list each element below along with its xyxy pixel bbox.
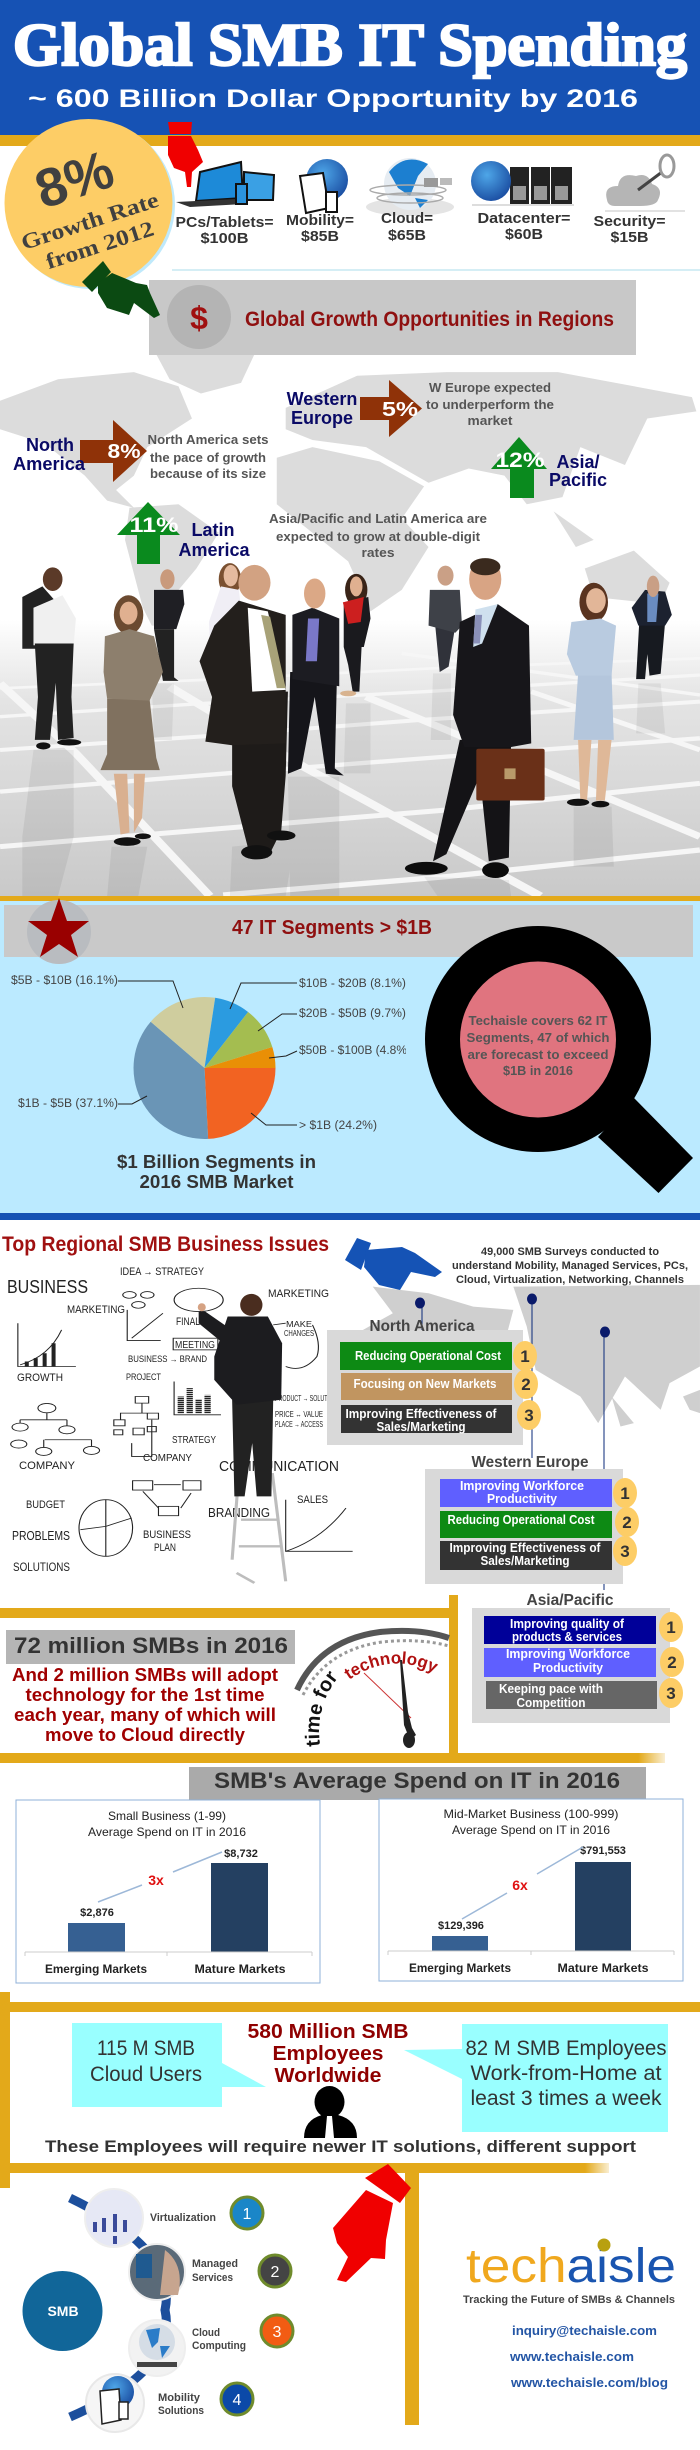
item: mobility solutions: Mobility [158,2392,201,2404]
icon: cloud globe [366,158,454,216]
item: managed services: Services [192,2272,233,2284]
SMB circle: SMB [47,2303,79,2319]
pie chart caption [117,1152,316,1192]
whiteboard sketches: MEETING [175,1340,215,1351]
panel: North America issues [327,1318,541,1445]
item: mobility solutions: Solutions [158,2405,204,2417]
item: mobility solutions [86,2374,253,2432]
arrow: Western Europe 5%: 5% [382,399,418,421]
bar chart: small business: Emerging Markets [45,1962,147,1976]
pie chart caption: $1 Billion Segments in [117,1152,316,1172]
whiteboard sketches: SOLUTIONS [13,1560,70,1574]
whiteboard sketches [7,1266,353,1574]
arrow: North America 8%: 8% [108,441,141,463]
label: Datacenter [478,210,571,243]
label: Western Europe: Europe [291,408,353,428]
label: Mobility: $85B [301,228,339,245]
bar chart: mid-market business: $129,396 [438,1920,484,1932]
whiteboard sketches: MARKETING [67,1304,125,1316]
panel: Western Europe issues: 1 [620,1484,630,1503]
contact details: www.techaisle.com [509,2350,634,2364]
label: Security: Security= [594,213,666,230]
panel: Asia/Pacific issues: Improving quality of [510,1617,625,1631]
map pins [415,1294,610,1590]
panel: Asia/Pacific issues: Asia/Pacific [526,1592,614,1609]
magnifying glass callout: Segments, 47 of which [466,1031,610,1045]
panel: Western Europe issues: 3 [620,1542,630,1561]
badge: 8% growth rate: from 2012 [43,216,157,274]
pie chart: $1B - $5B (37.1%) [18,1098,118,1110]
person: man with jacket over shoulder [22,567,81,749]
icon: large red pointing hand [333,2164,411,2282]
label: Datacenter: $60B [505,226,543,243]
arrow: Latin America 11%: 11% [130,514,179,537]
pie chart [11,975,411,1139]
label: Asia/Pacific: Asia/ [556,452,600,472]
label: Datacenter: Datacenter= [478,210,571,227]
magnifying glass callout [425,926,693,1193]
magnifying glass callout: Techaisle covers 62 IT [468,1014,608,1028]
whiteboard sketches: COMPANY [19,1460,76,1472]
text: Western Europe note: to underperform the [426,397,554,412]
icon: red pointing hand [168,122,203,187]
icon: blue pointing hand [345,1238,442,1290]
contact details: www.techaisle.com/blog [510,2376,668,2390]
panel: Western Europe issues: Improving Effectiveness of [450,1541,601,1555]
whiteboard sketches: BRANDING [208,1505,270,1520]
world map and floor background [0,354,700,896]
panel: Asia/Pacific issues: 3 [666,1684,676,1703]
whiteboard sketches: MAKE [286,1320,312,1329]
text: North America note [148,432,268,481]
item: cloud computing [129,2315,293,2376]
whiteboard sketches: PLAN [154,1542,176,1554]
person: woman in light blue [567,583,616,807]
label: Cloud: Cloud= [381,210,433,227]
text: Western Europe note: W Europe expected [429,380,551,395]
bar chart: small business: Mature Markets [194,1962,286,1976]
panel: Western Europe issues: Sales/Marketing [480,1554,570,1568]
bar chart: mid-market business: Mid-Market Business (100-999) [444,1807,618,1821]
label: Latin America: America [178,540,251,560]
icon: green pointing hand [82,261,160,318]
bar chart: small business: $2,876 [80,1907,114,1919]
subtitle: ~ 600 Billion Dollar Opportunity by 2016 [28,85,638,113]
text: 2 million SMBs: technology for the 1st time [26,1685,264,1705]
label: Western Europe: Western [287,389,357,409]
panel: North America issues: Sales/Marketing [376,1420,466,1434]
panel: North America issues: 2 [521,1375,531,1394]
panel: Asia/Pacific issues: Productivity [533,1661,603,1675]
icon: PCs and tablets [176,162,274,207]
floor reflections [22,673,665,896]
pie chart: > $1B (24.2%) [299,1120,377,1132]
SMB circle [22,2271,102,2351]
label: Western Europe [287,389,357,428]
panel: Asia/Pacific issues: 2 [667,1653,677,1672]
pie chart: $10B - $20B (8.1%) [299,978,406,990]
whiteboard sketches: BUDGET [26,1499,65,1511]
bar chart: small business: $8,732 [224,1848,258,1860]
panel: Asia/Pacific issues: Keeping pace with [499,1682,603,1696]
magnifying glass callout: $1B in 2016 [503,1064,573,1078]
gold dividers, SMB section [0,1595,665,1763]
whiteboard sketches: PROBLEMS [12,1528,70,1543]
heading: 580 million employees: 580 Million SMB [248,2021,408,2043]
text: 2 million SMBs: And 2 million SMBs will adopt [12,1665,278,1685]
pie chart: $5B - $10B (16.1%) [11,975,118,987]
text: newer IT solutions: These Employees will require newer IT solutions, different support [45,2138,637,2156]
section banner: average spend [189,1767,646,1800]
whiteboard sketches: BUSINESS → BRAND [128,1354,207,1364]
world map, regional issues [339,1285,700,1426]
text: North America note: North America sets [148,432,268,447]
whiteboard sketches: PRICE ↔ VALUE [275,1410,323,1419]
whiteboard sketches: FINAL [176,1316,200,1328]
callout: cloud users: 115 M SMB [97,2037,195,2060]
arrow: Asia/Pacific 12% [491,437,547,498]
text: 2 million SMBs: move to Cloud directly [45,1725,245,1745]
item: managed services: 2 [271,2264,280,2281]
label: Asia/Pacific [549,452,607,490]
item: cloud computing: Cloud [192,2327,220,2339]
panel: Western Europe issues: Productivity [487,1492,557,1506]
contact details: inquiry@techaisle.com [512,2324,657,2338]
person: woman in brown suit [100,595,163,846]
business people group [22,558,672,878]
bar chart: small business: 3x [148,1872,164,1888]
whiteboard sketches: PRODUCT → SOLUTION [275,1394,337,1403]
arrow: Western Europe 5% [360,380,422,437]
whiteboard sketches: GROWTH [17,1372,63,1384]
text: North America note: because of its size [150,466,266,481]
label: PCs/Tablets [176,214,274,247]
heading: 580 million employees [248,2021,408,2087]
person: man in gray suit [429,566,462,672]
text: 2 million SMBs [12,1665,278,1745]
badge: 8% growth rate: Growth Rate [18,187,162,255]
label: Security [594,213,666,246]
pie chart: $20B - $50B (9.7%) [299,1008,406,1020]
clock: time for technology [294,1628,450,1748]
logo: techaisle: techaisle [466,2240,676,2293]
pie chart caption: 2016 SMB Market [140,1172,294,1192]
survey note: understand Mobility, Managed Services, PCs, [452,1260,688,1272]
bar chart: mid-market business: Average Spend on IT in 2016 [452,1823,610,1837]
bar chart: mid-market business [379,1799,683,1981]
whiteboard sketches: IDEA → STRATEGY [120,1266,205,1278]
bar chart: mid-market business: $791,553 [580,1845,626,1857]
label: Cloud: $65B [388,227,426,244]
whiteboard sketches: COMMUNICATION [219,1458,339,1475]
item: mobility solutions: 4 [233,2392,242,2409]
callout: work from home: Work-from-Home at [470,2062,662,2085]
badge: 8% growth rate: 8% [28,139,121,220]
section banner: global growth: Global Growth Opportunities in Regions [245,308,614,331]
text: North America note: the pace of growth [150,450,266,465]
survey note: 49,000 SMB Surveys conducted to [481,1246,659,1258]
person: man far right [632,576,672,679]
panel: Western Europe issues: Reducing Operational Cost [448,1513,595,1527]
label: North America: North [26,435,74,455]
callout: cloud users: Cloud Users [90,2063,202,2086]
section banner: global growth [149,280,636,355]
label: North America: America [13,454,86,474]
icon: security cloud and key [605,155,685,212]
item: virtualization: Virtualization [150,2212,216,2224]
arrow: Asia/Pacific 12%: 12% [496,449,545,472]
gold dividers, employees section [0,1992,700,2425]
label: Mobility [286,212,354,245]
section banner: global growth: $ [190,300,208,336]
arrow: Latin America 11% [117,502,180,564]
item: managed services: Managed [192,2258,238,2270]
section banner: average spend: SMB's Average Spend on IT in 2016 [214,1768,620,1793]
panel: North America issues: Reducing Operational Cost [355,1349,502,1363]
bar chart: small business: Small Business (1-99) [108,1809,226,1823]
item: virtualization: 1 [243,2206,252,2223]
whiteboard sketches: BUSINESS [7,1277,88,1297]
heading: 47 IT segments: 47 IT Segments > $1B [232,917,432,939]
panel: Western Europe issues: 2 [622,1513,632,1532]
panel: Western Europe issues: Western Europe [472,1454,589,1471]
magnifying glass callout: are forecast to exceed [468,1048,608,1062]
panel: Asia/Pacific issues: Competition [516,1696,586,1710]
icon: datacenter [471,161,574,206]
panel: Western Europe issues: Improving Workforce [460,1479,584,1493]
panel: North America issues: 1 [520,1347,530,1366]
pie chart: $50B - $100B (4.8%) [299,1045,411,1057]
panel: North America issues: North America [370,1318,475,1335]
panel: North America issues: Improving Effectiveness of [346,1407,497,1421]
text: Asia/Pacific and Latin America note: expected to grow at double-digit [276,529,481,544]
panel: North America issues: Focusing on New Markets [354,1377,497,1391]
panel: Asia/Pacific issues: products & services [512,1630,622,1644]
label: Latin America [178,520,251,560]
clock: time for technology: time for [304,1670,336,1747]
icon: mobility [300,159,348,213]
contact details [509,2324,668,2390]
panel: North America issues: 3 [524,1406,534,1425]
whiteboard sketches: BUSINESS [143,1529,191,1541]
whiteboard sketches: PLACE → ACCESS [275,1420,323,1429]
label: PCs/Tablets: $100B [200,230,249,247]
label: PCs/Tablets: PCs/Tablets= [176,214,274,231]
heading: top regional issues: Top Regional SMB Business Issues [2,1233,329,1256]
whiteboard sketches: MARKETING [268,1288,329,1300]
panel: Asia/Pacific issues [472,1592,684,1723]
panel: Asia/Pacific issues: Improving Workforce [506,1647,630,1661]
label: Mobility: Mobility= [286,212,354,229]
person: small man in dark suit [154,569,184,681]
item: cloud computing: Computing [192,2340,246,2352]
text: Western Europe note: market [468,413,513,428]
heading: 580 million employees: Worldwide [274,2065,382,2087]
whiteboard sketches: COMPANY [143,1453,192,1464]
man on ladder [198,1294,286,1583]
logo: techaisle: Tracking the Future of SMBs & Channels [463,2294,675,2306]
icon: employee silhouette [304,2086,357,2138]
callout: work from home [404,2024,668,2132]
arrow: North America 8% [80,420,147,482]
bar chart: mid-market business: Mature Markets [558,1961,649,1975]
whiteboard sketches: STRATEGY [172,1435,216,1446]
callout: work from home: 82 M SMB Employees [466,2037,666,2060]
callout: cloud users [72,2023,266,2107]
text: Asia/Pacific and Latin America note [269,511,487,560]
label: Asia/Pacific: Pacific [549,470,607,490]
bar chart: mid-market business: 6x [512,1877,528,1893]
title: Global SMB IT Spending [13,12,687,78]
panel: 47 IT segments [0,896,700,1220]
heading: 72 million SMBs [6,1630,295,1664]
whiteboard sketches: SALES [297,1494,328,1506]
badge: 8% growth rate [4,119,175,289]
text: Asia/Pacific and Latin America note: Asia/Pacific and Latin America are [269,511,487,526]
text: 2 million SMBs: each year, many of which will [14,1705,276,1725]
clock: time for technology: technology [344,1651,438,1678]
diagram: SMB focus areas [22,2189,293,2432]
header band [0,0,700,146]
survey note [452,1246,688,1286]
person: main man with briefcase [405,558,545,878]
item: managed services [129,2244,291,2300]
bar chart: small business [16,1800,320,1983]
label: North America [13,435,86,474]
person: older man in front [200,565,296,859]
text: Asia/Pacific and Latin America note: rates [362,545,394,560]
label: Security: $15B [610,229,649,246]
whiteboard sketches: CHANGES [284,1329,314,1338]
bar chart: mid-market business: Emerging Markets [409,1961,511,1975]
callout: work from home: least 3 times a week [470,2087,662,2110]
person: young man [288,578,344,776]
bar chart: small business: Average Spend on IT in 2016 [88,1825,246,1839]
person: woman in white blouse [209,563,243,647]
person: woman with red folder [340,574,371,696]
item: virtualization [85,2189,263,2247]
panel: Asia/Pacific issues: 1 [666,1618,676,1637]
whiteboard sketches: PROJECT [126,1372,161,1382]
survey note: Cloud, Virtualization, Networking, Channels [456,1274,684,1286]
text: Western Europe note [426,380,554,428]
item: cloud computing: 3 [273,2324,282,2341]
icon: star [27,898,91,964]
label: Cloud [381,210,433,244]
heading: 72 million SMBs: 72 million SMBs in 2016 [14,1633,288,1658]
label: Latin America: Latin [192,520,234,540]
panel: Western Europe issues [425,1454,639,1584]
heading: 580 million employees: Employees [272,2043,384,2065]
